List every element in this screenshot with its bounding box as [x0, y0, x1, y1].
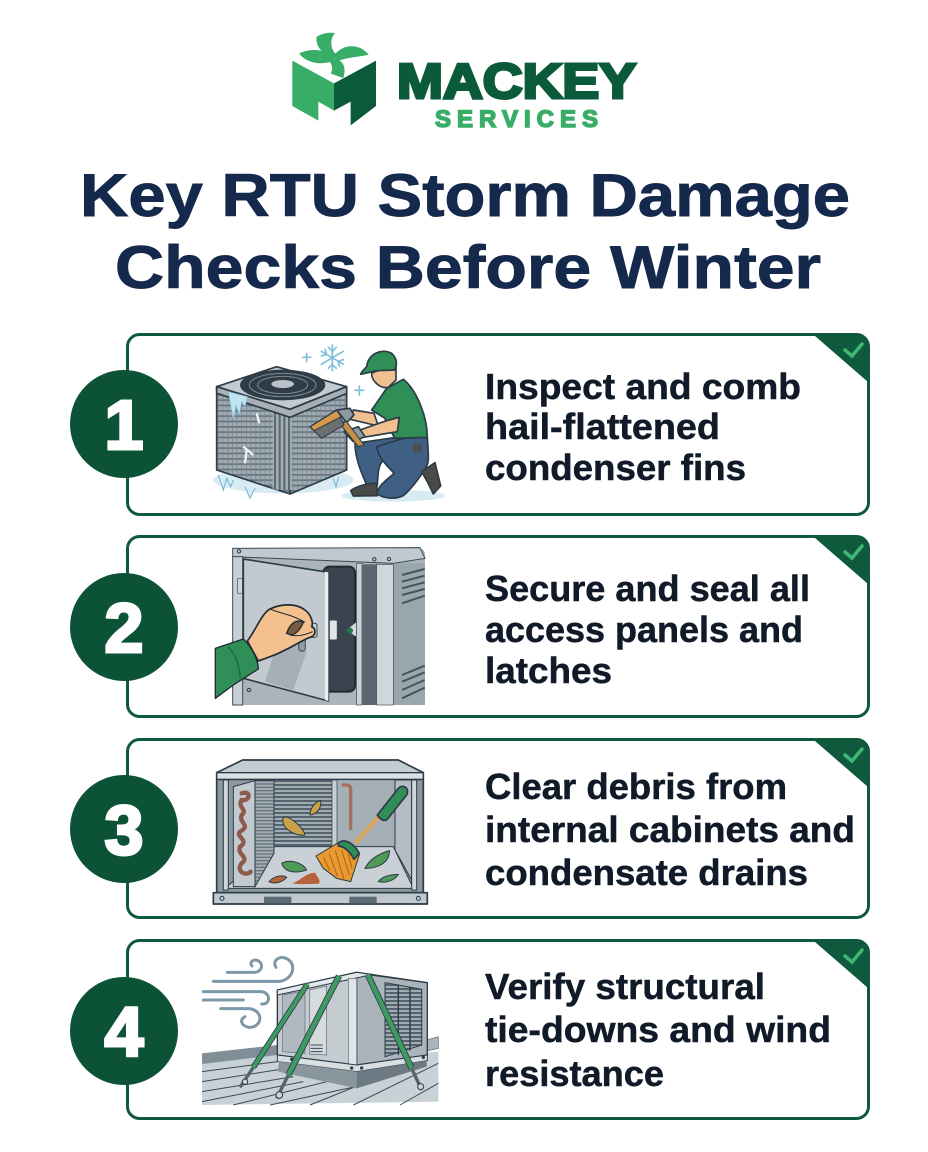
step 1 text: Inspect and comb — [485, 366, 801, 407]
corner check badge — [815, 942, 868, 988]
step 2 text: access panels and — [485, 609, 803, 650]
icon: fan cube — [292, 33, 376, 125]
number badge 3 — [70, 775, 178, 883]
title — [80, 162, 850, 301]
number badge 4: 4 — [105, 993, 144, 1071]
step 3 text — [485, 766, 855, 893]
wordmark: Services: SERVICES — [435, 106, 598, 133]
ratchets — [240, 1067, 422, 1098]
straps — [253, 984, 307, 1067]
broom — [355, 817, 378, 843]
panel: step 3 — [70, 740, 868, 918]
number badge 3: 3 — [105, 791, 143, 869]
hand — [247, 605, 315, 661]
step 1 text: hail-flattened — [485, 406, 720, 447]
illustration: hand latching access panel — [215, 548, 425, 705]
step 3 text: Clear debris from — [485, 766, 787, 807]
card frame — [128, 740, 868, 918]
illustration: broom clearing debris from cabinet — [213, 760, 427, 904]
corner check badge — [815, 538, 868, 584]
corner check badge — [815, 741, 868, 787]
technician — [355, 437, 423, 485]
number badge 1 — [70, 370, 178, 478]
step 4 text: tie-downs and wind — [485, 1009, 831, 1050]
step 4 text — [485, 966, 831, 1094]
snowflake — [303, 345, 364, 395]
step 4 text: resistance — [485, 1053, 664, 1094]
step 2 text: Secure and seal all — [485, 568, 810, 609]
number badge 1: 1 — [105, 386, 143, 464]
step 1 text — [485, 366, 801, 488]
step 1 text: condenser fins — [485, 447, 746, 488]
logo: Mackey Services — [292, 33, 636, 133]
panel: step 2 — [70, 536, 868, 716]
wordmark: Mackey: MACKEY — [397, 55, 636, 109]
title: Checks Before Winter — [115, 234, 821, 301]
wind lines — [203, 957, 293, 1027]
leaves — [283, 817, 305, 835]
step 2 text: latches — [485, 650, 612, 691]
number badge 4 — [70, 977, 178, 1085]
panel: step 1 — [70, 334, 868, 514]
step 3 text: condensate drains — [485, 852, 808, 893]
title: Key RTU Storm Damage — [80, 162, 850, 229]
step 2 text — [485, 568, 810, 691]
card frame — [128, 536, 868, 716]
number badge 2: 2 — [105, 589, 143, 667]
number badge 2 — [70, 573, 178, 681]
illustration: technician combing condenser fins — [213, 345, 445, 502]
step 3 text: internal cabinets and — [485, 809, 855, 850]
card frame — [128, 334, 868, 514]
corner check badge — [815, 336, 868, 382]
card frame — [128, 940, 868, 1118]
sleeve — [215, 639, 258, 698]
step 4 text: Verify structural — [485, 966, 765, 1007]
panel: step 4 — [70, 940, 868, 1118]
illustration: strapped rooftop unit in wind — [202, 957, 438, 1105]
